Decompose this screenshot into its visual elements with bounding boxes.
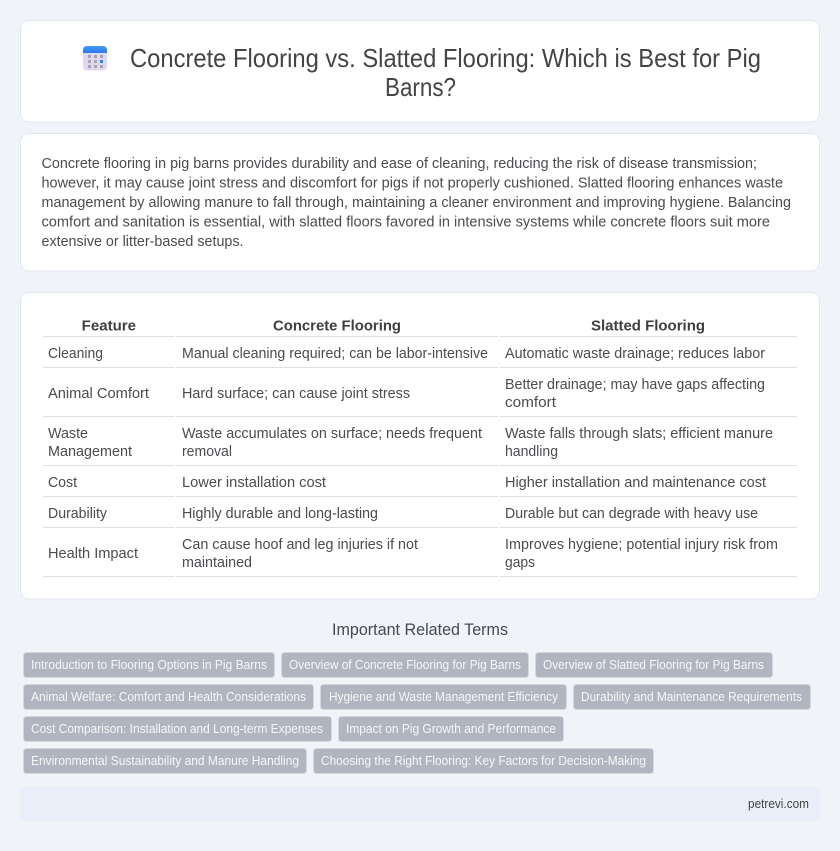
chip bbox=[314, 748, 654, 774]
chip bbox=[282, 652, 528, 678]
text block: summary paragraph: management by allowing manure to fall through, maintaining a cleaner environment and improving hygiene. Balancing bbox=[42, 195, 791, 211]
chip: Durability and Maintenance Requirements bbox=[581, 690, 802, 704]
row: waste management: Waste bbox=[48, 426, 88, 442]
row: cost: Higher installation and maintenance cost bbox=[505, 475, 766, 491]
chip bbox=[320, 684, 566, 710]
chip bbox=[536, 652, 772, 678]
table header row bbox=[82, 318, 705, 334]
chip bbox=[24, 652, 274, 678]
title: Barns? bbox=[385, 74, 456, 102]
row: durability: Highly durable and long-lasting bbox=[182, 506, 378, 522]
footer: petrevi.com bbox=[748, 796, 809, 811]
row: cleaning bbox=[48, 346, 765, 362]
row: waste management: handling bbox=[505, 444, 558, 460]
row: health impact bbox=[48, 537, 778, 571]
title bbox=[130, 45, 761, 102]
text block: summary paragraph bbox=[42, 156, 791, 250]
row: health impact: Improves hygiene; potential injury risk from bbox=[505, 537, 778, 553]
row: health impact: Can cause hoof and leg injuries if not bbox=[182, 537, 418, 553]
row: cleaning: Automatic waste drainage; reduces labor bbox=[505, 346, 765, 362]
chip: Overview of Slatted Flooring for Pig Barns bbox=[543, 658, 764, 672]
chip: Choosing the Right Flooring: Key Factors for Decision-Making bbox=[321, 754, 646, 768]
row: cleaning: Cleaning bbox=[48, 346, 103, 362]
text block: summary paragraph: however, it may cause joint stress and discomfort for pigs if not properly cushioned. Slatted flooring enhances waste bbox=[42, 176, 783, 192]
chip: Overview of Concrete Flooring for Pig Barns bbox=[289, 658, 521, 672]
row: health impact: maintained bbox=[182, 555, 252, 571]
row: animal comfort: Hard surface; can cause joint stress bbox=[182, 386, 410, 402]
row: animal comfort: comfort bbox=[505, 395, 556, 411]
chip: Hygiene and Waste Management Efficiency bbox=[329, 690, 559, 704]
panel: header bbox=[20, 20, 820, 122]
row: durability: Durability bbox=[48, 506, 108, 522]
chip bbox=[338, 716, 564, 742]
panel: comparison table bbox=[20, 292, 820, 599]
chip bbox=[574, 684, 810, 710]
chip: Introduction to Flooring Options in Pig Barns bbox=[31, 658, 267, 672]
row: waste management: Waste accumulates on surface; needs frequent bbox=[182, 426, 482, 442]
row: durability: Durable but can degrade with heavy use bbox=[505, 506, 758, 522]
chip: Environmental Sustainability and Manure Handling bbox=[31, 754, 299, 768]
title: Concrete Flooring vs. Slatted Flooring: Which is Best for Pig bbox=[130, 45, 761, 73]
heading: important related terms: Important Related Terms bbox=[332, 621, 508, 639]
row: animal comfort: Animal Comfort bbox=[48, 386, 149, 402]
row: cost: Cost bbox=[48, 475, 77, 491]
icon: calendar grid bbox=[83, 46, 107, 70]
row: cost: Lower installation cost bbox=[182, 475, 326, 491]
row: waste management: Waste falls through slats; efficient manure bbox=[505, 426, 773, 442]
row: waste management: Management bbox=[48, 444, 132, 460]
chip bbox=[24, 716, 332, 742]
row: animal comfort: Better drainage; may have gaps affecting bbox=[505, 377, 765, 393]
panel: description bbox=[20, 134, 820, 271]
row: cleaning: Manual cleaning required; can be labor-intensive bbox=[182, 346, 488, 362]
text block: summary paragraph: comfort and sanitation is essential, with slatted floors favored in intensive systems while concrete floors suit more bbox=[42, 214, 770, 230]
row: health impact: Health Impact bbox=[48, 546, 138, 562]
chip bbox=[24, 748, 306, 774]
chip bbox=[24, 684, 314, 710]
row: waste management: removal bbox=[182, 444, 232, 460]
chip: Animal Welfare: Comfort and Health Considerations bbox=[31, 690, 306, 704]
chip: Cost Comparison: Installation and Long-term Expenses bbox=[31, 722, 323, 736]
table header row: Feature bbox=[82, 318, 136, 334]
chip: Impact on Pig Growth and Performance bbox=[346, 722, 556, 736]
table header row: Concrete Flooring bbox=[273, 318, 401, 334]
row: waste management bbox=[48, 426, 773, 460]
text block: summary paragraph: Concrete flooring in pig barns provides durability and ease of cleaning, reducing the risk of disease transmission; bbox=[42, 156, 757, 172]
row: cost bbox=[48, 475, 766, 491]
table header row: Slatted Flooring bbox=[591, 318, 705, 334]
row: durability bbox=[48, 506, 758, 522]
text block: summary paragraph: extensive or litter-based setups. bbox=[42, 234, 244, 250]
row: animal comfort bbox=[48, 377, 765, 411]
footer bbox=[20, 787, 820, 821]
row: health impact: gaps bbox=[505, 555, 535, 571]
panel: related term chips bbox=[24, 652, 810, 774]
